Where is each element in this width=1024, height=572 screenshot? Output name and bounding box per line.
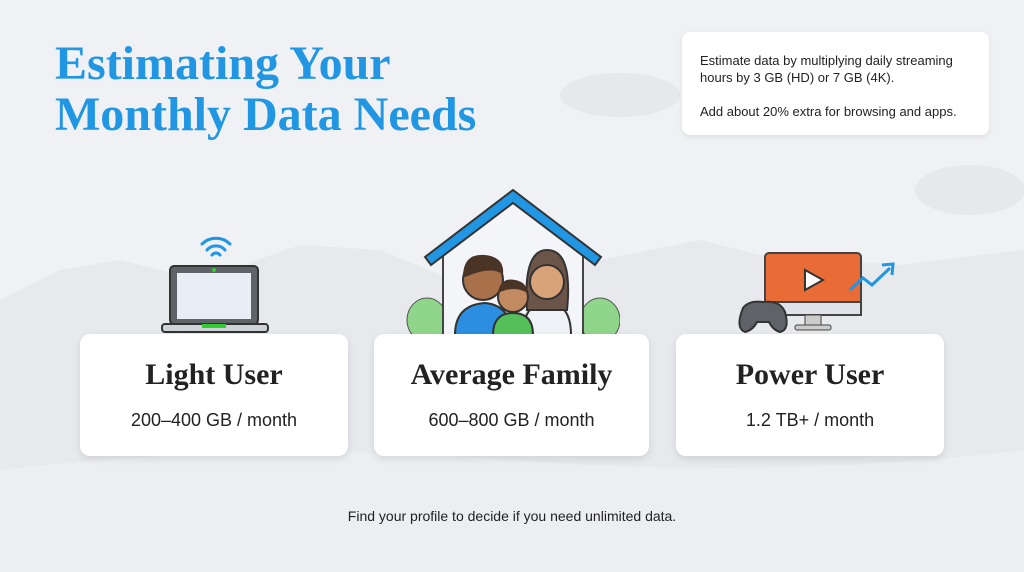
icon: family house bbox=[406, 188, 620, 334]
title: Estimating Your bbox=[55, 37, 391, 90]
info note bbox=[682, 32, 989, 135]
info note: Add about 20% extra for browsing and apps. bbox=[700, 104, 957, 119]
card: light user: Light User bbox=[145, 358, 283, 391]
footer note: Find your profile to decide if you need unlimited data. bbox=[348, 508, 676, 524]
title bbox=[55, 37, 476, 141]
icon: laptop with wifi bbox=[161, 236, 269, 333]
title: Monthly Data Needs bbox=[55, 88, 476, 141]
icon: monitor, gamepad, trend arrow bbox=[738, 252, 895, 333]
card: light user: 200–400 GB / month bbox=[131, 410, 297, 430]
card: power user bbox=[676, 334, 944, 456]
card: power user: 1.2 TB+ / month bbox=[746, 410, 874, 430]
info note: Estimate data by multiplying daily streaming hours by 3 GB (HD) or 7 GB (4K). bbox=[700, 53, 953, 85]
card: average family: Average Family bbox=[411, 358, 612, 391]
card: light user bbox=[80, 334, 348, 456]
card: power user: Power User bbox=[736, 358, 884, 391]
card: average family: 600–800 GB / month bbox=[428, 410, 595, 430]
card: average family bbox=[374, 334, 649, 456]
